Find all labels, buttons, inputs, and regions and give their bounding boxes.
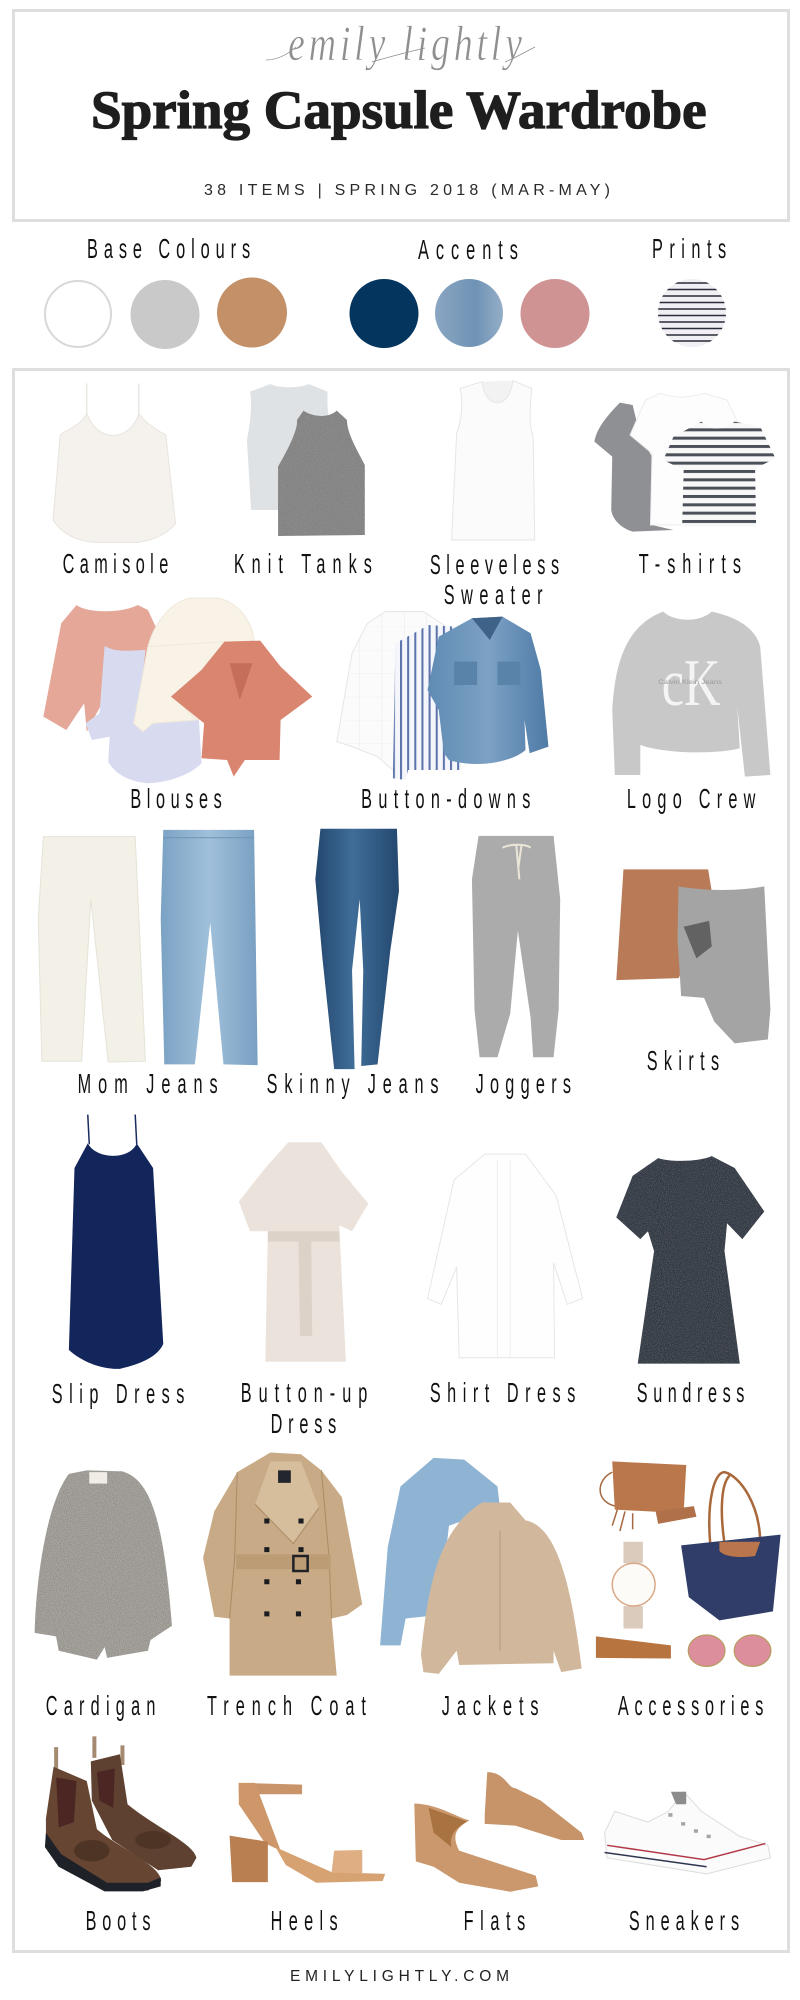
colour palette: accents bbox=[350, 233, 590, 348]
heading: base colours: Base Colours bbox=[87, 232, 250, 264]
item: skinny jeans: Skinny Jeans bbox=[267, 1069, 439, 1099]
item: blouses bbox=[43, 598, 312, 814]
item: skirts bbox=[616, 869, 770, 1076]
item: logo crew: Logo Crew bbox=[627, 784, 756, 814]
item: button-downs: Button-downs bbox=[361, 784, 530, 814]
logo small print: Calvin Klein Jeans bbox=[658, 678, 722, 686]
item: t-shirts bbox=[594, 393, 776, 579]
item: boots bbox=[45, 1736, 196, 1936]
item: sleeveless sweater: Sleeveless bbox=[430, 550, 559, 580]
subtitle: 38 ITEMS | SPRING 2018 (MAR-MAY) bbox=[204, 182, 610, 199]
header panel bbox=[14, 10, 788, 220]
item: logo crew bbox=[612, 612, 770, 814]
item: mom jeans bbox=[38, 830, 258, 1099]
item: mom jeans: Mom Jeans bbox=[78, 1069, 218, 1099]
item: heels bbox=[230, 1783, 385, 1936]
heading: prints: Prints bbox=[652, 232, 726, 264]
colour palette: prints bbox=[652, 232, 726, 347]
item: joggers: Joggers bbox=[476, 1069, 571, 1099]
item: button-downs bbox=[337, 612, 548, 814]
item: logo crew: cK bbox=[662, 645, 720, 720]
swatch: pink bbox=[520, 279, 590, 348]
item: button-up dress bbox=[239, 1142, 368, 1439]
item: accessories: Accessories bbox=[618, 1691, 763, 1721]
sunglasses bbox=[688, 1635, 771, 1666]
colour palette: base colours bbox=[45, 232, 287, 349]
logo: emily lightly signature: emily lightly bbox=[288, 16, 522, 71]
item: t-shirts: T-shirts bbox=[639, 549, 741, 579]
item: flats bbox=[414, 1772, 584, 1936]
item: sleeveless sweater bbox=[430, 381, 559, 610]
item: sneakers bbox=[605, 1792, 770, 1936]
item: knit tanks: Knit Tanks bbox=[234, 549, 372, 579]
item: jackets bbox=[380, 1458, 582, 1721]
item: button-up dress: Dress bbox=[271, 1409, 336, 1439]
item: shirt dress: Shirt Dress bbox=[430, 1378, 575, 1408]
item: jackets: Jackets bbox=[442, 1691, 539, 1721]
item: trench coat bbox=[203, 1452, 366, 1721]
heading: accents: Accents bbox=[418, 233, 518, 265]
item: sundress bbox=[616, 1156, 764, 1408]
item: cardigan: Cardigan bbox=[46, 1691, 155, 1721]
item: sleeveless sweater: Sweater bbox=[444, 580, 543, 610]
item: flats: Flats bbox=[464, 1906, 525, 1936]
belt bbox=[596, 1636, 671, 1659]
item: joggers bbox=[472, 836, 571, 1099]
item: skirts: Skirts bbox=[647, 1046, 719, 1076]
title: Spring Capsule Wardrobe bbox=[91, 80, 706, 140]
item: heels: Heels bbox=[271, 1906, 338, 1936]
swatch: stripes bbox=[658, 279, 726, 347]
item: accessories bbox=[596, 1461, 781, 1721]
swatch: navy bbox=[350, 279, 418, 348]
swatch: grey bbox=[130, 280, 200, 349]
item: camisole bbox=[53, 383, 176, 579]
wardrobe panel bbox=[14, 370, 788, 1952]
item: button-up dress: Button-up bbox=[241, 1378, 367, 1408]
item: slip dress bbox=[52, 1115, 184, 1409]
item: sundress: Sundress bbox=[637, 1378, 744, 1408]
swatch: tan bbox=[217, 278, 287, 348]
item: knit tanks bbox=[234, 384, 372, 579]
swatch: white bbox=[45, 281, 111, 347]
item: cardigan bbox=[35, 1470, 172, 1721]
crossbody bag bbox=[600, 1461, 696, 1531]
item: blouses: Blouses bbox=[130, 784, 222, 814]
item: shirt dress bbox=[428, 1154, 583, 1408]
item: skinny jeans bbox=[267, 829, 439, 1099]
tote bag bbox=[681, 1472, 781, 1620]
item: boots: Boots bbox=[86, 1906, 151, 1936]
swatch: denim bbox=[435, 279, 503, 347]
item: sneakers: Sneakers bbox=[629, 1906, 739, 1936]
item: trench coat: Trench Coat bbox=[207, 1691, 366, 1721]
watch bbox=[612, 1542, 655, 1629]
footer: website: EMILYLIGHTLY.COM bbox=[290, 1968, 509, 1985]
item: slip dress: Slip Dress bbox=[52, 1379, 184, 1409]
item: camisole: Camisole bbox=[63, 549, 168, 579]
